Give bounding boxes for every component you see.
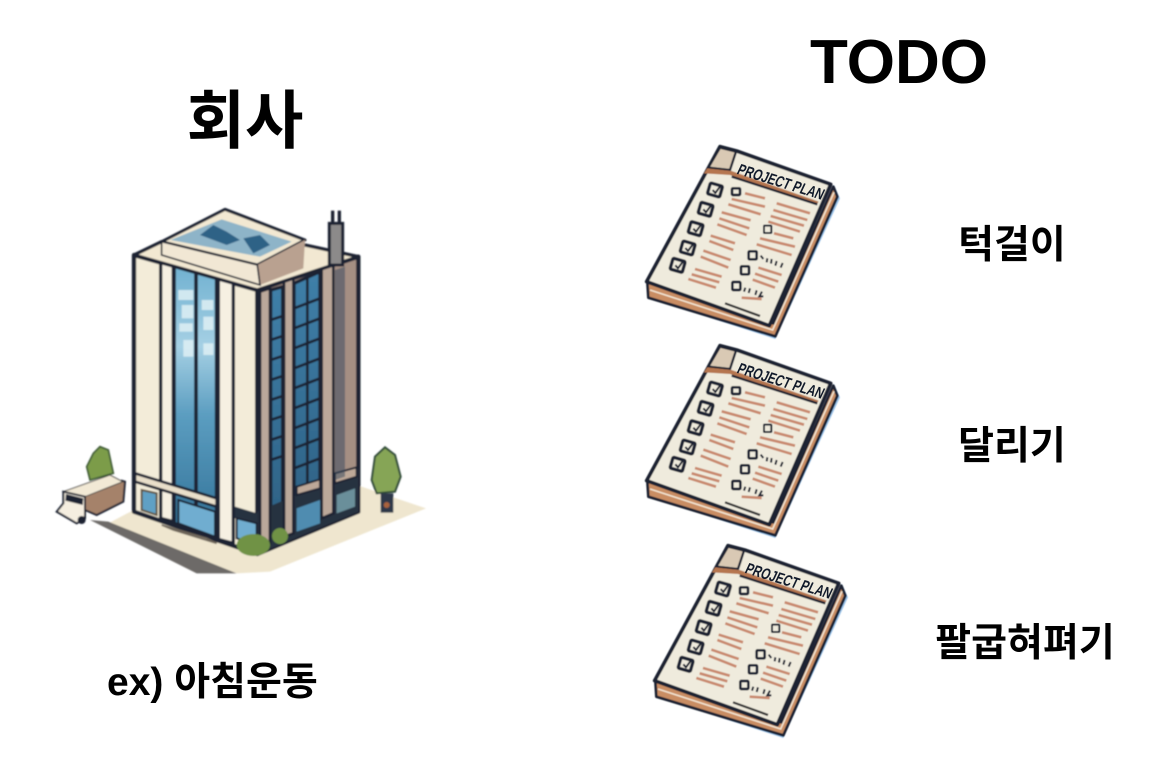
- right pillars: [260, 288, 270, 547]
- left columns: [161, 258, 173, 522]
- icon: project plan 2: [647, 346, 840, 538]
- icon: project plan 3: PROJECT PLAN: [742, 561, 835, 602]
- roof rim: [134, 242, 358, 290]
- road: [90, 520, 237, 573]
- icon: project plan 2: PROJECT PLAN: [734, 361, 827, 402]
- rooftop glass: [171, 219, 292, 257]
- label: pull-ups: 턱걸이: [958, 224, 1066, 267]
- right glass: [271, 287, 283, 542]
- caption: morning exercise: ex) 아침운동: [107, 661, 318, 704]
- antenna: [329, 223, 343, 265]
- icon: project plan 1: [647, 147, 840, 339]
- left glass: [174, 264, 217, 538]
- left facade: [134, 255, 257, 554]
- title: company: 회사: [187, 87, 303, 157]
- shrubs: [237, 534, 270, 556]
- ground floor windows: [142, 490, 157, 515]
- truck: [85, 481, 125, 515]
- icon: project plan 3: [655, 546, 848, 738]
- roof upper block: [162, 209, 305, 265]
- icon: office building: [57, 209, 426, 573]
- title: TODO: TODO: [810, 28, 988, 97]
- label: push-ups: 팔굽혀펴기: [935, 622, 1115, 665]
- base band: [257, 468, 358, 554]
- label: running: 달리기: [958, 425, 1066, 468]
- ground plot: [108, 487, 426, 573]
- right facade: [257, 257, 358, 554]
- icon: project plan 1: PROJECT PLAN: [734, 162, 827, 203]
- entrance steps: [162, 525, 217, 543]
- dark wall strip: [335, 267, 345, 480]
- trees: [87, 447, 113, 480]
